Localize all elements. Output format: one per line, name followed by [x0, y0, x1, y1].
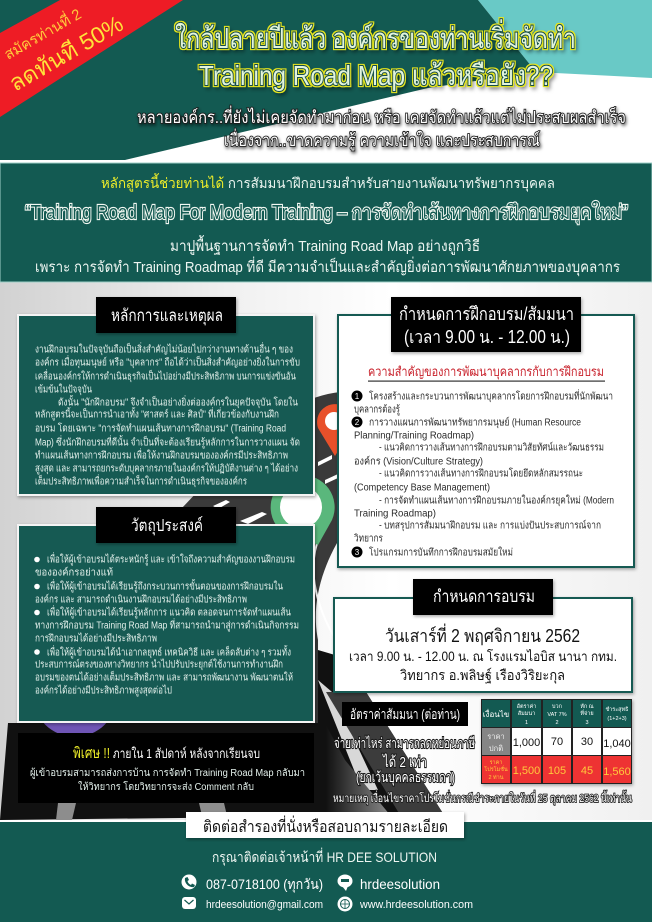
principles text: งานฝึกอบรมในปัจจุบันถือเป็นสิ่งสำคัญไม่น้อยไปกว่างานทางด้านอื่น ๆ ของ — [35, 342, 293, 356]
course banner — [0, 163, 652, 282]
tax deduction note: จ่ายเท่าไหร่ สามารถลดหย่อนภาษี — [334, 735, 475, 751]
callout: special offer: ผู้เข้าอบรมสามารถส่งการบ้าน การจัดทำ Training Road Map กลับมา — [30, 767, 305, 779]
heading: training date — [413, 579, 553, 615]
icon: red map pin — [317, 404, 353, 456]
course description: มาปูพื้นฐานการจัดทำ Training Road Map อย่างถูกวิธี — [170, 235, 480, 255]
phone number: 087-0718100 (ทุกวัน) — [206, 876, 323, 893]
table row: promotion price — [482, 756, 631, 783]
panel: principles and rationale — [18, 297, 314, 495]
objectives list: การฝึกอบรมได้อย่างมีประสิทธิภาพ — [35, 632, 157, 644]
principles text: เต็มประสิทธิภาพเพื่อความสำเร็จในการดำเนินธุรกิจขององค์กร — [35, 474, 247, 488]
table header: บวก — [552, 704, 562, 710]
agenda list: บุคลากรต้องรู้ — [354, 404, 400, 416]
discount ribbon: ลดทันที 50% — [5, 10, 127, 96]
agenda list: - แนวคิดการวางเส้นทางการฝึกอบรมโดยยึดหลักสมรรถนะ — [379, 466, 583, 480]
agenda list — [352, 388, 614, 558]
objectives list: อบรมของตนได้อย่างเต็มประสิทธิภาพ และ สามารถพัฒนางาน พัฒนาตนให้ — [35, 670, 293, 684]
table header: 2 — [555, 720, 559, 726]
line id: hrdeesolution — [360, 876, 440, 892]
table row: promotion price: 2 ท่าน — [488, 775, 504, 781]
heading: principles: หลักการและเหตุผล — [111, 306, 223, 326]
title: Training Road Map แล้วหรือยัง?? — [199, 60, 553, 91]
email address: hrdeesolution@gmail.com — [206, 899, 323, 911]
heading: objectives — [96, 507, 236, 543]
agenda list: - บทสรุปการสัมมนาฝึกอบรม และ การแบ่งปันประสบการณ์จาก — [379, 520, 601, 532]
icon: number 3: 3 — [355, 548, 360, 557]
table row: regular price: ราคา — [487, 732, 505, 741]
table header — [482, 700, 631, 727]
table header: ชำระสุทธิ — [605, 706, 629, 713]
principles text: อบรม โดยเฉพาะ "การจัดทำแผนเส้นทางการฝึกอบรม" (Training Road — [35, 422, 286, 434]
agenda list: Training Roadmap) — [354, 508, 436, 520]
discount ribbon: สมัครท่านที่ 2 — [0, 3, 84, 63]
callout: special offer — [18, 733, 314, 803]
agenda list: Planning/Training Roadmap) — [354, 430, 474, 442]
objectives list: เพื่อให้ผู้เข้าอบรมได้เรียนรู้ถึงกระบวนการขั้นตอนของการฝึกอบรมใน — [47, 578, 283, 592]
agenda list: องค์กร (Vision/Culture Strategy) — [354, 456, 483, 468]
price table — [481, 699, 632, 784]
footer heading: ติดต่อสำรองที่นั่งหรือสอบถามรายละเอียด — [203, 815, 448, 836]
heading: training time: (เวลา 9.00 น. - 12.00 น.) — [404, 327, 570, 347]
icon: number 2: 2 — [355, 418, 360, 427]
rate label — [342, 702, 468, 726]
table row: regular price: 1,000 — [513, 737, 540, 749]
table header: 3 — [585, 720, 589, 726]
principles text — [35, 342, 300, 488]
table header: VAT 7% — [547, 712, 567, 718]
date text: วันเสาร์ที่ 2 พฤศจิกายน 2562 — [385, 623, 580, 646]
icon: purple map pin — [33, 653, 117, 737]
icon: email — [182, 897, 196, 909]
icon: website — [338, 896, 352, 912]
tax deduction note: (ยกเว้นบุคคลธรรมดา) — [356, 769, 455, 786]
heading: objectives: วัตถุประสงค์ — [131, 516, 203, 536]
objectives list: เพื่อให้ผู้เข้าอบรมได้เรียนรู้หลักการ แนวคิด ตลอดจนการจัดทำแผนเส้น — [47, 604, 291, 618]
objectives list: องค์กรได้อย่างมีประสิทธิภาพสูงสุดต่อไป — [35, 684, 172, 696]
table row: promotion price: 1,500 — [513, 765, 540, 777]
footer panel — [0, 812, 652, 922]
agenda list: การวางแผนการพัฒนาทรัพยากรมนุษย์ (Human Resource — [369, 416, 581, 428]
objectives list: ทางการฝึกอบรม Training Road Map ที่สามารถนำมาสู่การดำเนินกิจกรรม — [35, 618, 299, 632]
rate label: อัตราค่าสัมมนา (ต่อท่าน) — [350, 706, 460, 722]
panel: training date — [334, 579, 632, 692]
table row: promotion price: โปรโมชั่น — [484, 765, 508, 773]
icon: number 1: 1 — [355, 392, 360, 401]
agenda list: (Competency Base Management) — [354, 482, 490, 494]
table header: ที่จ่าย — [580, 709, 594, 717]
website url: www.hrdeesolution.com — [359, 899, 473, 911]
principles text: องค์กร เมื่อทุนมนุษย์ หรือ "บุคลากร" ถือได้ว่าเป็นสิ่งสำคัญอย่างยิ่งในการขับ — [35, 354, 300, 368]
objectives list: ขององค์กรอย่างแท้ — [35, 566, 113, 578]
principles text: ดังนั้น "นักฝึกอบรม" จึงจำเป็นอย่างยิ่งต่อองค์กรในยุคปัจจุบัน โดยใน — [58, 394, 298, 408]
discount ribbon — [0, 0, 183, 117]
heading: training date: กำหนดการอบรม — [433, 587, 535, 606]
table row: promotion price: 45 — [581, 765, 593, 777]
road illustration — [0, 392, 444, 820]
red subheading: ความสำคัญของการพัฒนาบุคลากรกับการฝึกอบรม — [368, 364, 604, 380]
table row: promotion price: 105 — [548, 765, 566, 777]
objectives list: เพื่อให้ผู้เข้าอบรมได้นำเอากลยุทธ์ เทคนิควิธี และ เคล็ดลับต่าง ๆ รวมทั้ง — [47, 644, 291, 658]
principles text: ทำแผนเส้นทางการฝึกอบรม เพื่อให้งานฝึกอบรมขององค์กรมีประสิทธิภาพ — [35, 448, 288, 462]
table row: promotion price: ราคา — [490, 760, 502, 766]
principles text: เคลื่อนองค์กรให้การดำเนินธุรกิจเป็นไปอย่างมีประสิทธิภาพ บนการแข่งขันอัน — [35, 368, 296, 382]
footer subheading: กรุณาติดต่อเจ้าหน้าที่ HR DEE SOLUTION — [212, 848, 437, 866]
panel: objectives — [18, 507, 314, 722]
table row: regular price: 1,040 — [603, 738, 631, 750]
table header: (1+2+3) — [607, 716, 627, 722]
speaker: วิทยากร อ.พลิษฐ์ เรืองวิริยะกุล — [400, 667, 565, 684]
table row: promotion price: 1,560 — [603, 766, 631, 778]
heading: principles — [96, 297, 236, 333]
agenda list: - แนวคิดการวางเส้นทางการฝึกอบรมตามวิสัยทัศน์และวัฒนธรรม — [379, 442, 604, 454]
icon: phone — [182, 874, 196, 890]
heading: training time — [391, 297, 581, 352]
heading: training time: กำหนดการฝึกอบรม/สัมมนา — [399, 304, 574, 324]
callout: special offer: ให้วิทยากร โดยวิทยากรจะส่ง Comment กลับ — [78, 780, 254, 793]
panel: training schedule content — [338, 297, 634, 567]
table header: สัมมนา — [518, 710, 535, 717]
icon: number 2 — [352, 416, 362, 428]
objectives list: ประสบการณ์ตรงของทางวิทยากร นำไปปรับประยุกต์ใช้งานการทำงานฝึก — [35, 658, 283, 670]
tax deduction note — [334, 735, 475, 786]
objectives list: องค์กร และ สามารถดำเนินงานฝึกอบรมได้อย่างมีประสิทธิภาพ — [35, 594, 247, 606]
subtitle — [137, 105, 626, 151]
title — [175, 19, 576, 91]
principles text: Map) ซึ่งนักฝึกอบรมที่ดีนั้น จำเป็นที่จะต้องเรียนรู้หลักการในการวางแผน จัด — [35, 434, 300, 448]
subtitle: เนื่องจาก..ขาดความรู้ ความเข้าใจ และประสบการณ์ — [224, 128, 540, 151]
callout: special offer: พิเศษ !! ภายใน 1 สัปดาห์ หลังจากเรียนจบ — [73, 745, 260, 762]
table row: regular price — [482, 728, 631, 755]
table row: regular price: ปกติ — [489, 744, 503, 753]
objectives list: เพื่อให้ผู้เข้าอบรมได้ตระหนักรู้ และ เข้าใจถึงความสำคัญของงานฝึกอบรม — [47, 552, 295, 566]
footer heading — [186, 812, 464, 838]
agenda list: วิทยากร — [354, 534, 384, 544]
table row: regular price: 70 — [551, 736, 563, 748]
agenda list: โปรแกรมการบันทึกการฝึกอบรมสมัยใหม่ — [369, 546, 513, 558]
table row: regular price: 30 — [581, 736, 593, 748]
principles text: หลักสูตรนี้จะเป็นการนำเอาทั้ง "ศาสตร์ และ ศิลป์" ที่เกี่ยวข้องกับงานฝึก — [35, 406, 279, 420]
icon: green map pin — [271, 475, 335, 545]
title: ใกล้ปลายปีแล้ว องค์กรของท่านเริ่มจัดทำ — [175, 19, 576, 54]
tax deduction note: ได้ 2 เท่า — [382, 753, 427, 771]
icon: number 1 — [352, 390, 362, 402]
table header: อัตราค่า — [517, 703, 536, 710]
table header: หัก ณ — [580, 703, 594, 710]
course intro line: หลักสูตรนี้ช่วยท่านได้ การสัมมนาฝึกอบรมสำหรับสายงานพัฒนาทรัพยากรบุคคล — [101, 173, 555, 192]
principles text: สูงสุด และ สามารถยกระดับบุคลากรภายในองค์กรให้ปฏิบัติงานต่าง ๆ ได้อย่าง — [35, 462, 298, 474]
objectives list — [34, 552, 299, 696]
header background shapes — [0, 0, 652, 163]
time and venue: เวลา 9.00 น. - 12.00 น. ณ โรงแรมไอบิส นานา กทม. — [349, 648, 617, 664]
table header: เงื่อนไข — [483, 708, 509, 719]
icon: number 3 — [352, 546, 362, 558]
principles text: เข้มข้นในปัจจุบัน — [35, 384, 92, 396]
table header: 1 — [525, 720, 528, 726]
icon: line — [338, 874, 352, 891]
